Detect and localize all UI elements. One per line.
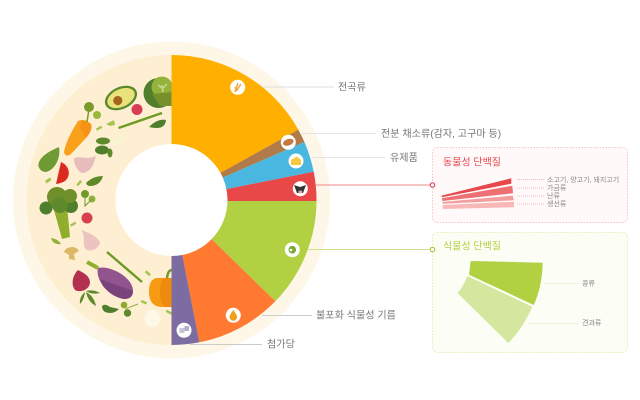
leader line: 첨가당 [190, 344, 262, 346]
connector: animal protein [316, 183, 435, 187]
panel: plant protein [432, 232, 628, 352]
icon: cabbage [144, 76, 174, 108]
icon: tomato slice [56, 162, 69, 184]
legend labels: 가금류 [547, 183, 567, 192]
label: 전곡류: 전곡류 [338, 82, 366, 94]
legend lines [529, 284, 579, 324]
leader line: 유제품 [312, 156, 385, 158]
icon: avocado [101, 81, 141, 115]
icon: green pepper [102, 305, 119, 313]
segment: 동물성 단백질 [226, 172, 317, 201]
icon: small leaf [51, 238, 61, 244]
icon: pumpkin [149, 270, 172, 307]
legend labels: 콩류 [582, 280, 595, 288]
heading: animal protein: 동물성 단백질 [443, 156, 501, 168]
vegetable illustration group [38, 76, 174, 327]
icon: broccoli [40, 187, 78, 239]
segment: 불포화 식물성 기름 [182, 239, 275, 342]
icon: herb leaves and onion [95, 134, 123, 158]
segment: 전곡류 [172, 55, 298, 173]
icon: red berry [82, 212, 92, 224]
chart: nutrition donut [172, 55, 317, 345]
icon: green leaf 2 [86, 176, 103, 186]
legend labels: 견과류 [582, 318, 602, 327]
icon: long asparagus [107, 252, 142, 282]
legend labels: 생선류 [547, 199, 567, 208]
legend labels: 난류 [547, 191, 560, 200]
icon: eggplant [87, 262, 133, 299]
wedge: 견과류 [458, 276, 532, 343]
icon: garlic upper [74, 156, 96, 173]
leader line: 전분 채소류 [300, 132, 376, 134]
outer cream ring [13, 42, 330, 358]
icon: sprig [81, 190, 96, 206]
icon: grain [230, 80, 245, 95]
legend labels [582, 280, 602, 327]
icon: oil drop [226, 308, 241, 323]
label: 첨가당: 첨가당 [267, 338, 295, 350]
icon: asparagus [118, 113, 162, 128]
icon: mushroom [64, 247, 79, 260]
panel: animal protein [432, 148, 628, 222]
segment: 유제품 [223, 142, 314, 189]
icon: green leaf [149, 120, 166, 128]
wedge: 콩류 [469, 261, 543, 305]
icon: carrot [64, 102, 101, 156]
icon: cow [293, 181, 308, 196]
segment: 식물성 단백질 [212, 201, 316, 301]
legend labels: 소고기, 양고기, 돼지고기 [547, 175, 619, 184]
icon: radish [132, 104, 142, 115]
segment: 전분 채소류 [220, 130, 304, 178]
leader line: 불포화 식물성 기름 [262, 314, 312, 316]
icon: white mushroom [144, 310, 160, 327]
connector: plant protein [308, 247, 435, 252]
icon: sprig lower [121, 302, 138, 317]
heading: plant protein: 식물성 단백질 [443, 240, 501, 252]
icon: beet [73, 270, 100, 306]
label: 불포화 식물성 기름: 불포화 식물성 기름 [316, 310, 396, 322]
leader line: 전곡류 [262, 86, 334, 88]
icon: garlic lower [81, 230, 100, 250]
fan chart: animal protein [441, 178, 514, 209]
icon: beans [285, 242, 300, 257]
segment: 첨가당 [172, 255, 199, 345]
icon: cheese [288, 154, 304, 168]
inner cream disc [26, 55, 316, 345]
icon: cucumber [38, 147, 59, 172]
label: 유제품: 유제품 [390, 152, 418, 164]
label: 전분 채소류: 전분 채소류(감자, 고구마 등) [381, 128, 501, 140]
legend lines [517, 180, 544, 204]
legend labels [547, 175, 619, 208]
icon: sugar cubes [176, 323, 192, 338]
icon: sweet potato [281, 135, 296, 150]
donut hole [116, 144, 228, 256]
icon: small leaf bits [45, 120, 172, 315]
